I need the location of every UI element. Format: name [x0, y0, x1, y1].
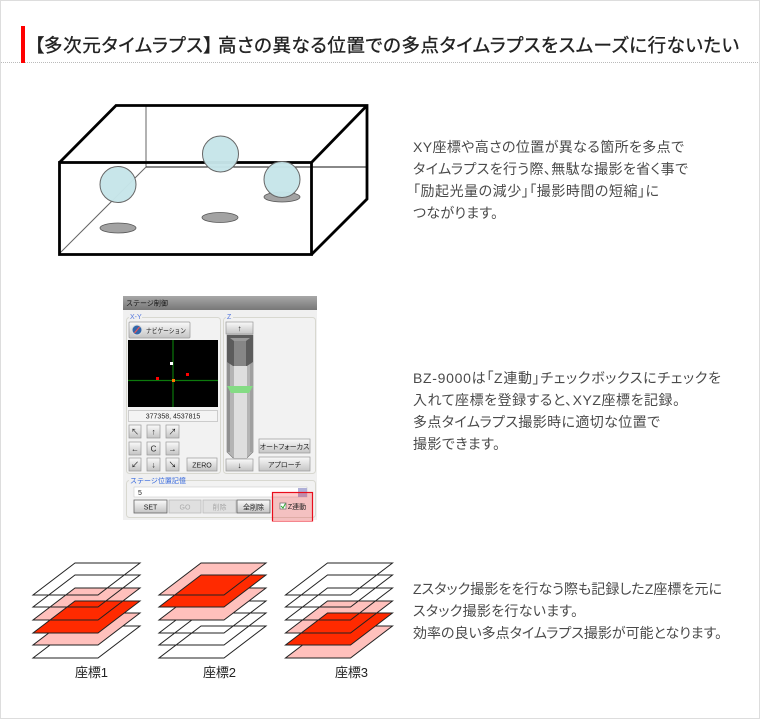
stage position memory group: 削除	[212, 502, 226, 512]
Z slider column	[227, 335, 253, 458]
box outline	[60, 106, 367, 254]
text block: section 2: 撮影できます。	[413, 436, 500, 452]
z-stack diagram: coordinate 1	[33, 563, 140, 680]
position map	[128, 340, 218, 407]
X-Y group	[126, 314, 220, 474]
direction buttons: ZERO	[192, 462, 212, 470]
label: 座標2	[203, 665, 236, 680]
highlighted Z checkbox	[272, 492, 312, 522]
direction buttons: ↑	[152, 428, 156, 436]
autofocus button	[259, 439, 310, 453]
title	[1, 26, 759, 63]
direction buttons: ↗	[168, 428, 176, 436]
stage position memory group	[126, 476, 316, 518]
window title bar: ステージ制御	[126, 298, 168, 308]
coordinates readout: 377358, 4537815	[146, 414, 200, 420]
text block: section 2	[413, 370, 721, 452]
text block: section 1	[413, 139, 688, 221]
spheres	[100, 136, 300, 202]
direction buttons: ↖	[131, 428, 139, 436]
Z up button	[226, 322, 253, 334]
direction buttons: ↙	[131, 460, 139, 470]
direction buttons: ←	[131, 444, 139, 454]
Z down button: ↓	[238, 461, 242, 470]
approach button: アプローチ	[268, 461, 301, 469]
text block: section 1: XY座標や高さの位置が異なる箇所を多点で	[413, 139, 684, 155]
text block: section 1: タイムラプスを行う際、無駄な撮影を省く事で	[413, 161, 688, 177]
stage position memory group: ステージ位置記憶	[130, 476, 186, 485]
autofocus button: オートフォーカス	[260, 443, 310, 451]
stage position memory group: 全削除	[243, 502, 264, 512]
text block: section 3	[413, 581, 722, 641]
direction buttons: ↘	[168, 460, 176, 470]
label: 座標1	[75, 665, 108, 680]
text block: section 1: つながります。	[413, 205, 498, 221]
title: 】	[203, 35, 222, 56]
title: 【	[26, 35, 45, 56]
stage position memory group: 5	[138, 490, 142, 497]
stage position memory group: SET	[144, 504, 158, 512]
stage position memory group: GO	[180, 504, 191, 512]
z-stack diagram: coordinate 2	[159, 563, 266, 680]
highlighted Z checkbox: Z連動	[288, 502, 306, 511]
direction buttons: ↓	[152, 460, 156, 470]
navigation button	[129, 322, 190, 338]
text block: section 2: 多点タイムラプス撮影時に適切な位置で	[413, 414, 660, 430]
z-stack diagram: coordinate 3	[286, 563, 392, 680]
title: 高さの異なる位置での多点タイムラプスをスムーズに行ないたい	[218, 35, 739, 56]
direction buttons: →	[168, 444, 176, 454]
Z group: Z	[227, 314, 232, 321]
Z group	[224, 314, 316, 474]
coordinates readout	[128, 410, 218, 422]
title: 多次元タイムラプス	[44, 35, 203, 56]
X-Y group: X-Y	[130, 314, 142, 321]
text block: section 2: BZ-9000は「Z連動」チェックボックスにチェックを	[413, 370, 721, 386]
Z down button	[226, 459, 253, 471]
label: 座標3	[335, 665, 368, 680]
text block: section 2: 入れて座標を登録すると、XYZ座標を記録。	[413, 392, 680, 408]
direction buttons	[129, 425, 217, 471]
text block: section 3: Zスタック撮影をを行なう際も記録したZ座標を元に	[413, 581, 722, 597]
window title bar	[123, 296, 317, 310]
navigation button: ナビゲーション	[146, 326, 186, 335]
text block: section 1: 「励起光量の減少」「撮影時間の短縮」に	[413, 183, 659, 199]
direction buttons: C	[151, 444, 157, 454]
text block: section 3: スタック撮影を行ないます。	[413, 603, 578, 619]
diagram: 3D box with spheres at different heights	[59, 105, 367, 254]
approach button	[259, 457, 310, 471]
Z up button: ↑	[238, 324, 242, 333]
software screenshot: stage control	[123, 296, 317, 522]
text block: section 3: 効率の良い多点タイムラプス撮影が可能となります。	[413, 625, 722, 641]
shadow ellipses	[100, 192, 300, 233]
